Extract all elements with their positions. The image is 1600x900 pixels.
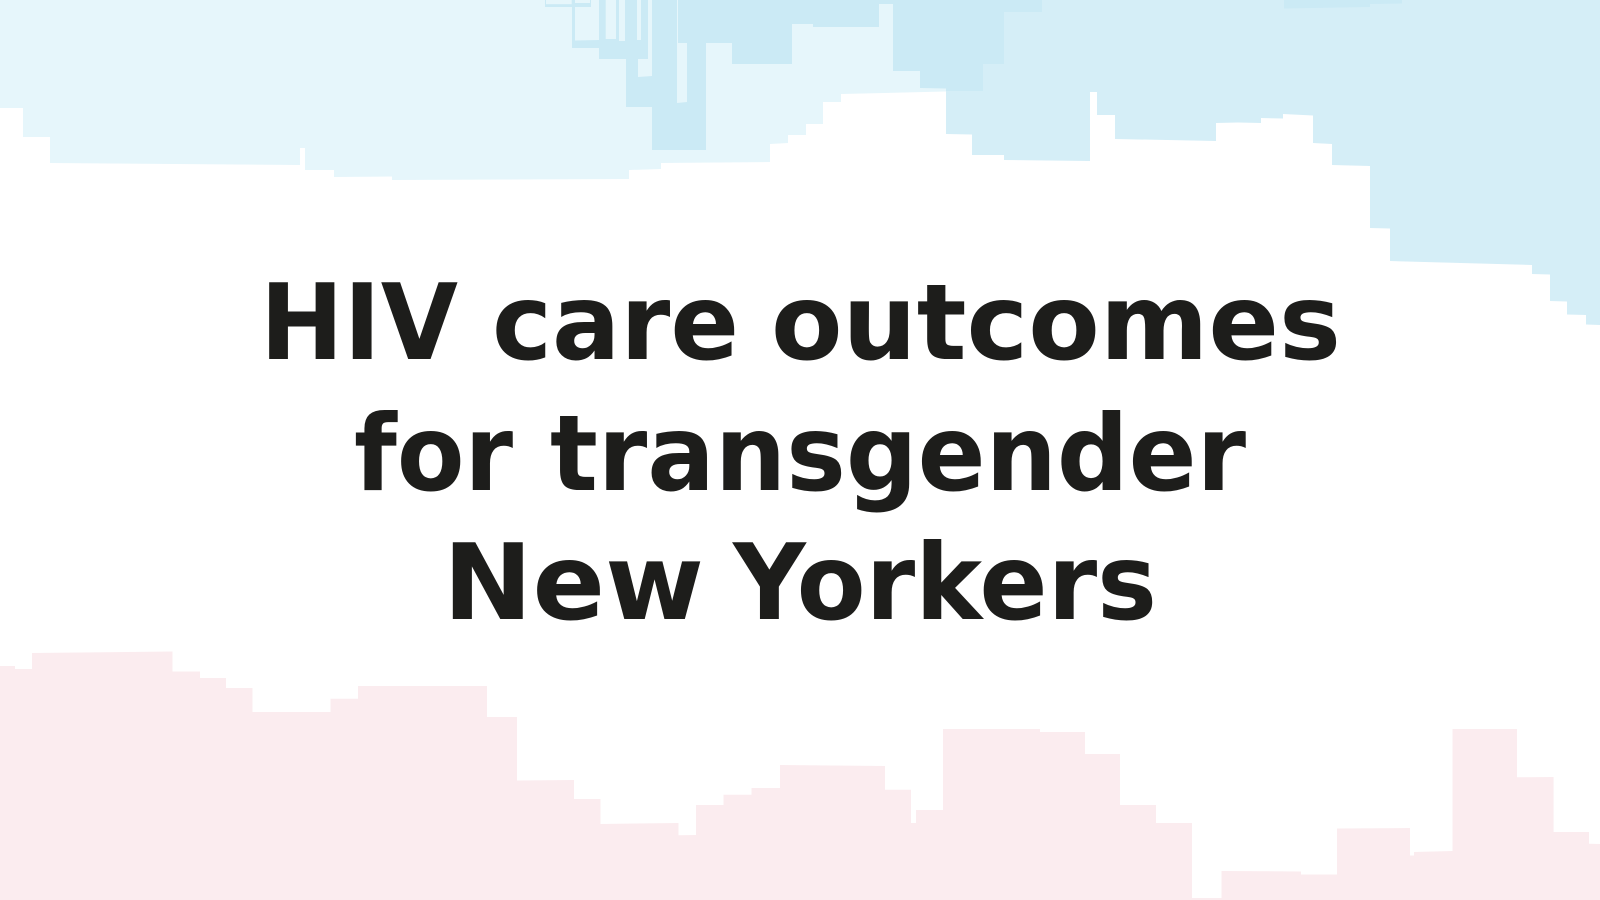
title: New [443, 522, 704, 644]
title: HIV [260, 262, 458, 384]
top right medium blue step area [946, 0, 1600, 325]
top left light blue step area [0, 0, 1000, 180]
title: Yorkers [731, 522, 1157, 644]
title: for [354, 393, 513, 515]
title [260, 262, 1341, 644]
title: care [492, 262, 739, 384]
title: outcomes [771, 262, 1341, 384]
overlapping darker blue step area [545, 0, 1042, 150]
top right darker blue sliver [1284, 0, 1402, 8]
title: transgender [550, 393, 1246, 515]
bottom pink step area [0, 652, 1600, 900]
